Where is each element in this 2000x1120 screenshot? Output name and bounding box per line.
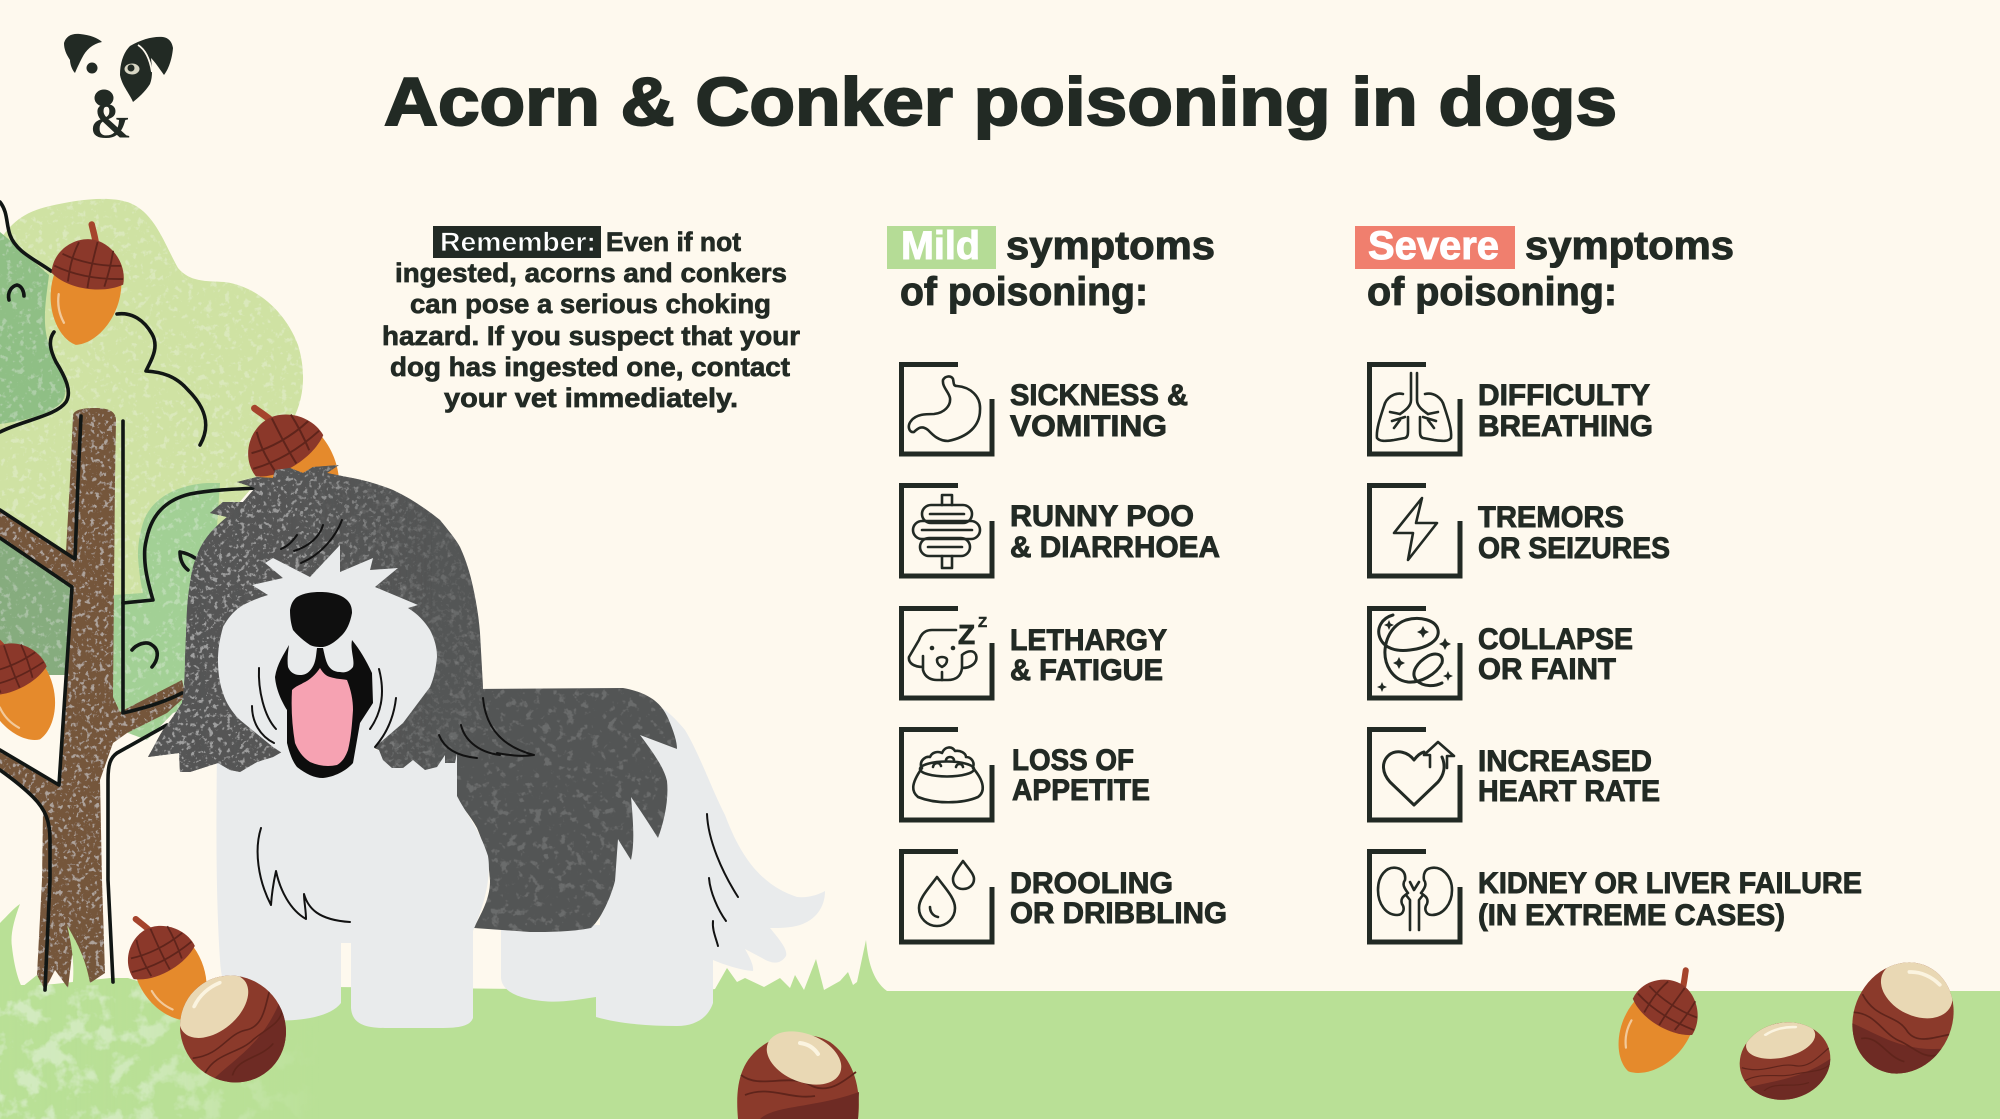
symptom: increased heart rate — [1370, 730, 1660, 820]
tree foliage: mid green left blob — [0, 232, 65, 424]
tree foliage: right green blob — [113, 483, 220, 740]
symptom: sickness and vomiting — [902, 364, 1188, 454]
symptom: lethargy and fatigue: & FATIGUE — [1010, 654, 1163, 687]
tree outlines — [0, 202, 258, 990]
symptom: tremors or seizures: TREMORS — [1478, 501, 1624, 534]
heading: mild symptoms — [887, 224, 1215, 314]
grass tuft over trunk — [67, 925, 90, 990]
acorn on the grass right — [1600, 954, 1719, 1090]
symptom: increased heart rate: INCREASED — [1478, 745, 1652, 778]
reminder text block: can pose a serious choking — [410, 289, 771, 319]
dog tail and back fur — [600, 688, 825, 971]
symptom: tremors or seizures — [1370, 486, 1670, 576]
reminder text block: Remember: — [440, 227, 596, 257]
dog head fur — [148, 465, 483, 772]
dog chest and front legs — [216, 750, 489, 1028]
reminder highlight label — [433, 226, 601, 258]
symptom: kidney or liver failure — [1370, 852, 1862, 942]
dog back legs — [501, 925, 713, 1026]
logo: dog and ampersand — [64, 34, 173, 148]
acorn in tree left — [0, 618, 73, 753]
title: Acorn & Conker poisoning in dogs — [384, 64, 1617, 140]
dog face white — [218, 545, 437, 780]
conker bottom middle — [737, 1021, 859, 1119]
grass — [0, 904, 2000, 1119]
dog dark body — [455, 688, 677, 932]
reminder text block: your vet immediately. — [444, 383, 738, 413]
dog head texture — [148, 465, 483, 772]
dog fur lines — [252, 520, 738, 946]
reminder text block: ingested, acorns and conkers — [395, 258, 787, 288]
reminder text block: dog has ingested one, contact — [390, 352, 790, 382]
symptom: runny poo and diarrhoea — [902, 486, 1220, 576]
tree trunk and branches — [0, 408, 186, 990]
logo: dog and ampersand: & — [90, 92, 132, 148]
symptom: increased heart rate: HEART RATE — [1478, 775, 1660, 808]
symptom: sickness and vomiting: VOMITING — [1010, 410, 1167, 443]
heading: severe symptoms: of poisoning: — [1367, 270, 1617, 314]
symptom: difficulty breathing: DIFFICULTY — [1478, 379, 1650, 412]
illustration: tree — [0, 199, 303, 990]
symptom: loss of appetite — [902, 730, 1150, 820]
symptom: lethargy and fatigue: LETHARGY — [1010, 624, 1167, 657]
panel: severe symptoms — [1355, 224, 1862, 942]
heading: mild symptoms: symptoms — [1006, 224, 1215, 268]
conker on the grass small — [1731, 1014, 1840, 1113]
reminder text block: hazard. If you suspect that your — [382, 321, 800, 351]
symptom: loss of appetite: APPETITE — [1012, 774, 1150, 807]
symptom: runny poo and diarrhoea: & DIARRHOEA — [1010, 531, 1220, 564]
symptom: drooling or dribbling — [902, 852, 1227, 942]
symptom: difficulty breathing — [1370, 364, 1653, 454]
symptom: collapse or faint: OR FAINT — [1478, 653, 1616, 686]
reminder text block — [382, 226, 800, 413]
dog nose — [290, 592, 352, 647]
acorn on dog head — [224, 385, 363, 539]
acorn in tree top — [42, 220, 131, 350]
conker on the ground left — [157, 952, 314, 1111]
symptom: collapse or faint: COLLAPSE — [1478, 623, 1633, 656]
heading: severe symptoms — [1355, 224, 1734, 314]
conker on the grass large — [1829, 944, 1974, 1098]
symptom: runny poo and diarrhoea: RUNNY POO — [1010, 500, 1194, 533]
reminder text block: Even if not — [606, 227, 741, 257]
symptom: difficulty breathing: BREATHING — [1478, 410, 1653, 443]
heading: severe symptoms: symptoms — [1525, 224, 1734, 268]
heading: mild symptoms: of poisoning: — [900, 270, 1148, 314]
symptom: collapse or faint — [1370, 608, 1633, 698]
dog mouth — [275, 640, 373, 778]
symptom: lethargy and fatigue: Z — [978, 614, 987, 631]
panel: mild symptoms — [887, 224, 1227, 942]
symptom: drooling or dribbling: DROOLING — [1010, 867, 1173, 900]
heading: mild symptoms: Mild — [901, 224, 980, 268]
symptom: lethargy and fatigue: Z — [958, 619, 975, 650]
symptom: kidney or liver failure: (IN EXTREME CASES) — [1478, 899, 1785, 932]
tree foliage: light green blob — [0, 199, 303, 600]
tree foliage: dark green lower-left — [0, 538, 72, 675]
heading: severe symptoms: Severe — [1368, 224, 1499, 268]
symptom: drooling or dribbling: OR DRIBBLING — [1010, 897, 1227, 930]
symptom: kidney or liver failure: KIDNEY OR LIVER FAILURE — [1478, 867, 1862, 900]
symptom: loss of appetite: LOSS OF — [1012, 744, 1134, 777]
symptom: lethargy and fatigue — [902, 608, 1167, 698]
symptom: sickness and vomiting: SICKNESS & — [1010, 379, 1188, 412]
dog — [148, 465, 825, 1028]
acorn on the ground left — [108, 900, 227, 1036]
dog tongue — [292, 668, 353, 766]
grass texture left — [0, 985, 320, 1119]
symptom: tremors or seizures: OR SEIZURES — [1478, 532, 1670, 565]
